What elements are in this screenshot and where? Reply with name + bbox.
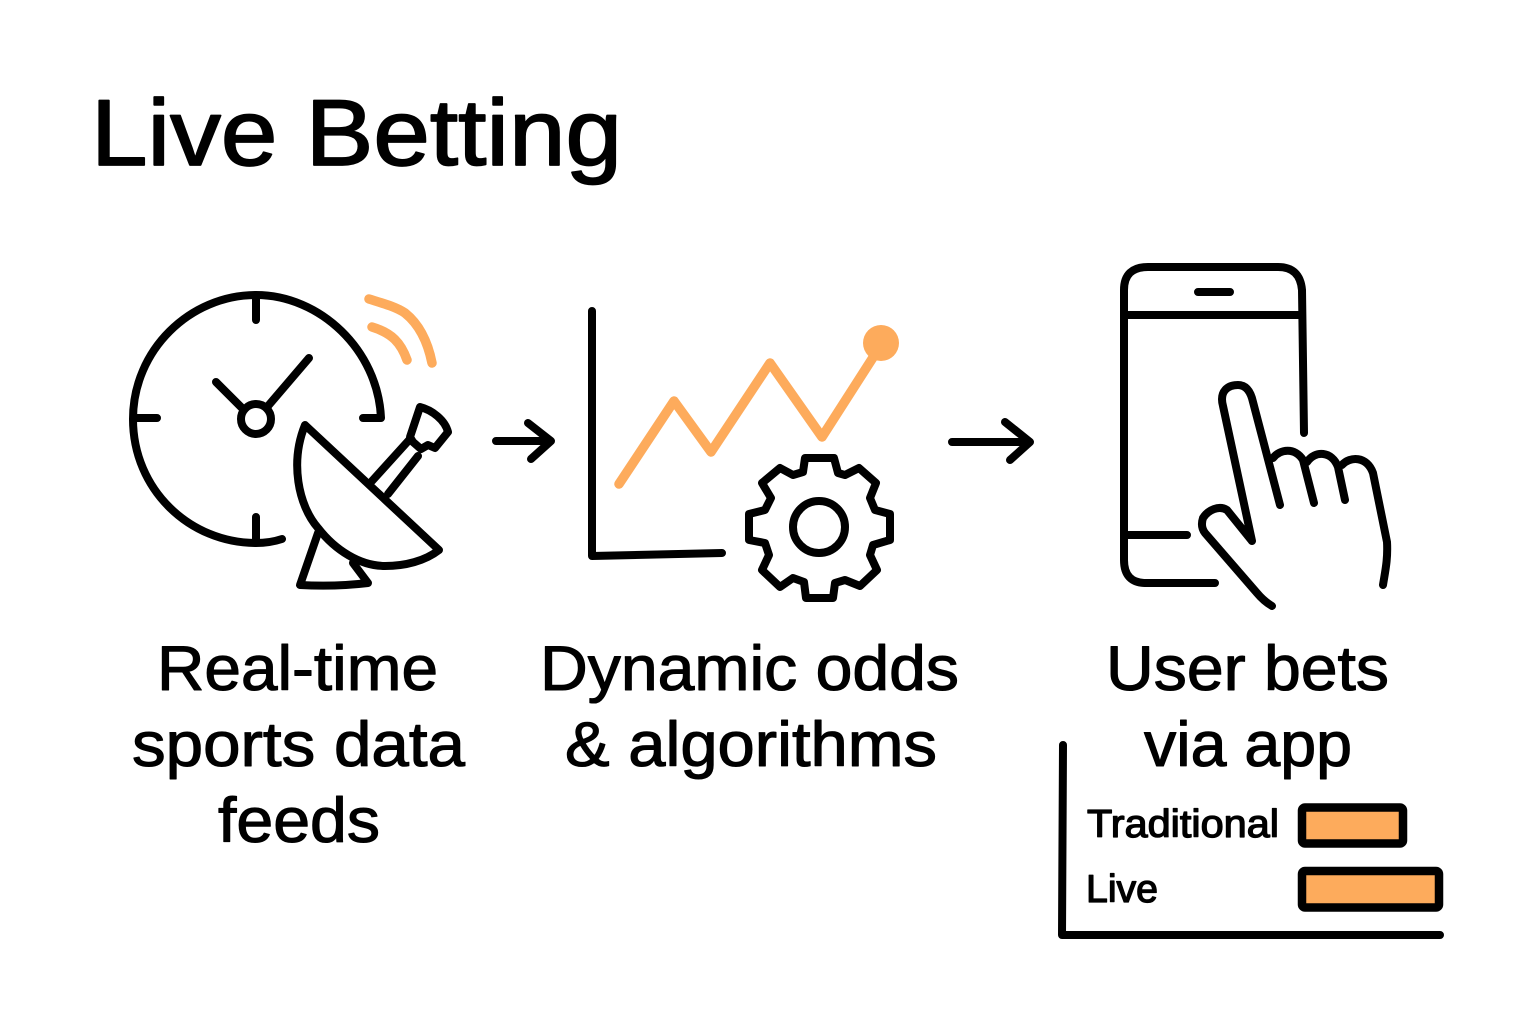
label: live: Live bbox=[1086, 868, 1158, 911]
arrow: odds to bets bbox=[952, 422, 1030, 460]
satellite dish bbox=[297, 407, 448, 586]
caption: user bets via app bbox=[1106, 634, 1389, 780]
gear bbox=[749, 458, 890, 598]
caption: real-time sports data feeds bbox=[132, 634, 466, 856]
odds trend line bbox=[619, 325, 899, 484]
caption: user bets via app: User bets bbox=[1106, 634, 1389, 704]
icon: chart with gear bbox=[592, 311, 899, 598]
bar: live bbox=[1302, 871, 1439, 908]
bar: traditional bbox=[1302, 808, 1403, 844]
caption: dynamic odds and algorithms: & algorithms bbox=[565, 710, 937, 780]
caption: real-time sports data feeds: Real-time bbox=[157, 634, 438, 704]
caption: dynamic odds and algorithms: Dynamic odds bbox=[540, 634, 959, 704]
icon: clock with satellite dish bbox=[133, 295, 448, 586]
signal waves bbox=[369, 299, 432, 363]
caption: user bets via app: via app bbox=[1144, 710, 1352, 780]
chart axes bbox=[592, 311, 722, 556]
hand bbox=[1202, 385, 1387, 606]
clock face bbox=[133, 295, 381, 543]
icon: phone with hand bbox=[1124, 267, 1387, 606]
caption: real-time sports data feeds: feeds bbox=[218, 786, 380, 856]
title: Live Betting bbox=[91, 80, 622, 185]
label: traditional: Traditional bbox=[1087, 803, 1279, 846]
caption: real-time sports data feeds: sports data bbox=[132, 710, 466, 780]
arrow: feeds to odds bbox=[496, 423, 551, 459]
phone outline bbox=[1124, 267, 1304, 583]
bar chart: traditional vs live bbox=[1062, 745, 1440, 935]
caption: dynamic odds and algorithms bbox=[540, 634, 959, 780]
